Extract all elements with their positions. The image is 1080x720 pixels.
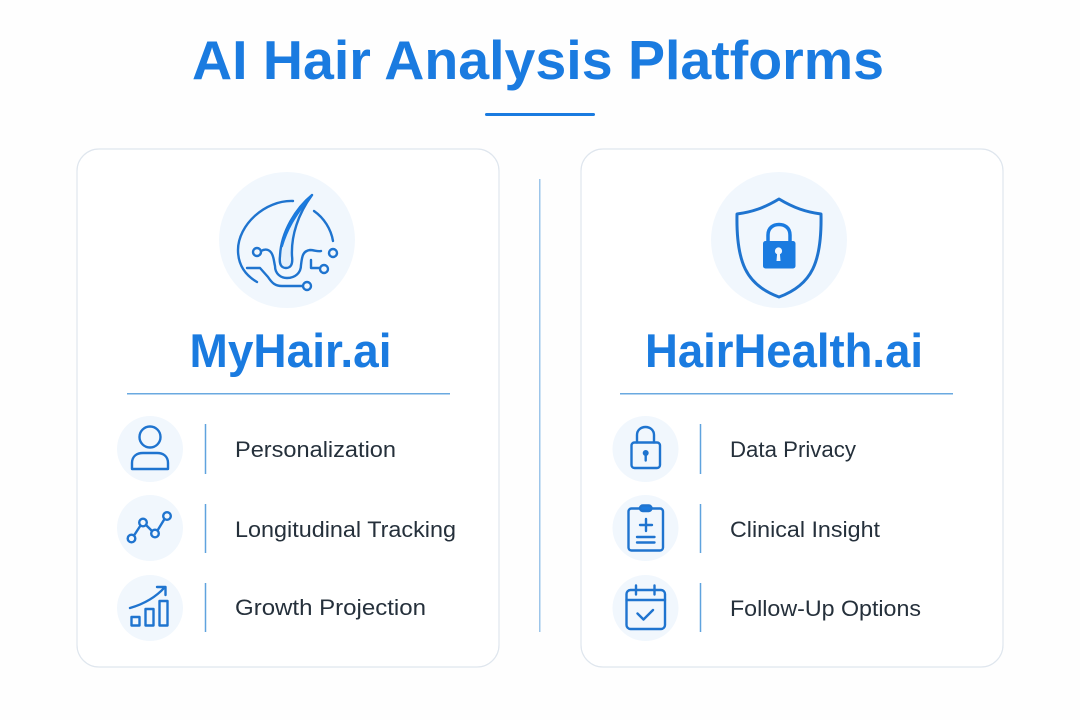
row: Growth Projection: Growth Projection: [235, 595, 426, 620]
row: Longitudinal Tracking: [117, 495, 456, 561]
center divider: [539, 179, 540, 632]
heading: MyHair.ai: MyHair.ai: [190, 324, 392, 377]
row: Personalization: [117, 416, 396, 482]
row: Growth Projection: [117, 575, 426, 641]
icon: person: [132, 426, 168, 469]
row: Follow-Up Options: [612, 575, 921, 641]
icon: line trend: [128, 512, 171, 542]
icon: hair follicle circuit: [219, 172, 355, 308]
panel: HairHealth.ai: [581, 149, 1003, 667]
icon: padlock: [632, 427, 660, 468]
title underline: [485, 113, 595, 116]
icon: calendar: [626, 586, 665, 629]
row: Clinical Insight: Clinical Insight: [730, 517, 880, 542]
row: Personalization: Personalization: [235, 437, 396, 462]
panel: MyHair.ai: [77, 149, 499, 667]
heading rule: [620, 393, 953, 394]
icon: growth chart: [130, 587, 168, 626]
row: Follow-Up Options: Follow-Up Options: [730, 596, 921, 621]
row: Longitudinal Tracking: Longitudinal Tracking: [235, 517, 456, 542]
row: Data Privacy: Data Privacy: [730, 437, 856, 462]
icon: clipboard: [628, 506, 663, 550]
heading rule: [127, 393, 450, 394]
title: AI Hair Analysis Platforms: [192, 29, 884, 91]
row: Clinical Insight: [612, 495, 880, 561]
icon: shield with lock: [711, 172, 847, 308]
heading: HairHealth.ai: HairHealth.ai: [645, 324, 923, 377]
row: Data Privacy: [612, 416, 856, 482]
